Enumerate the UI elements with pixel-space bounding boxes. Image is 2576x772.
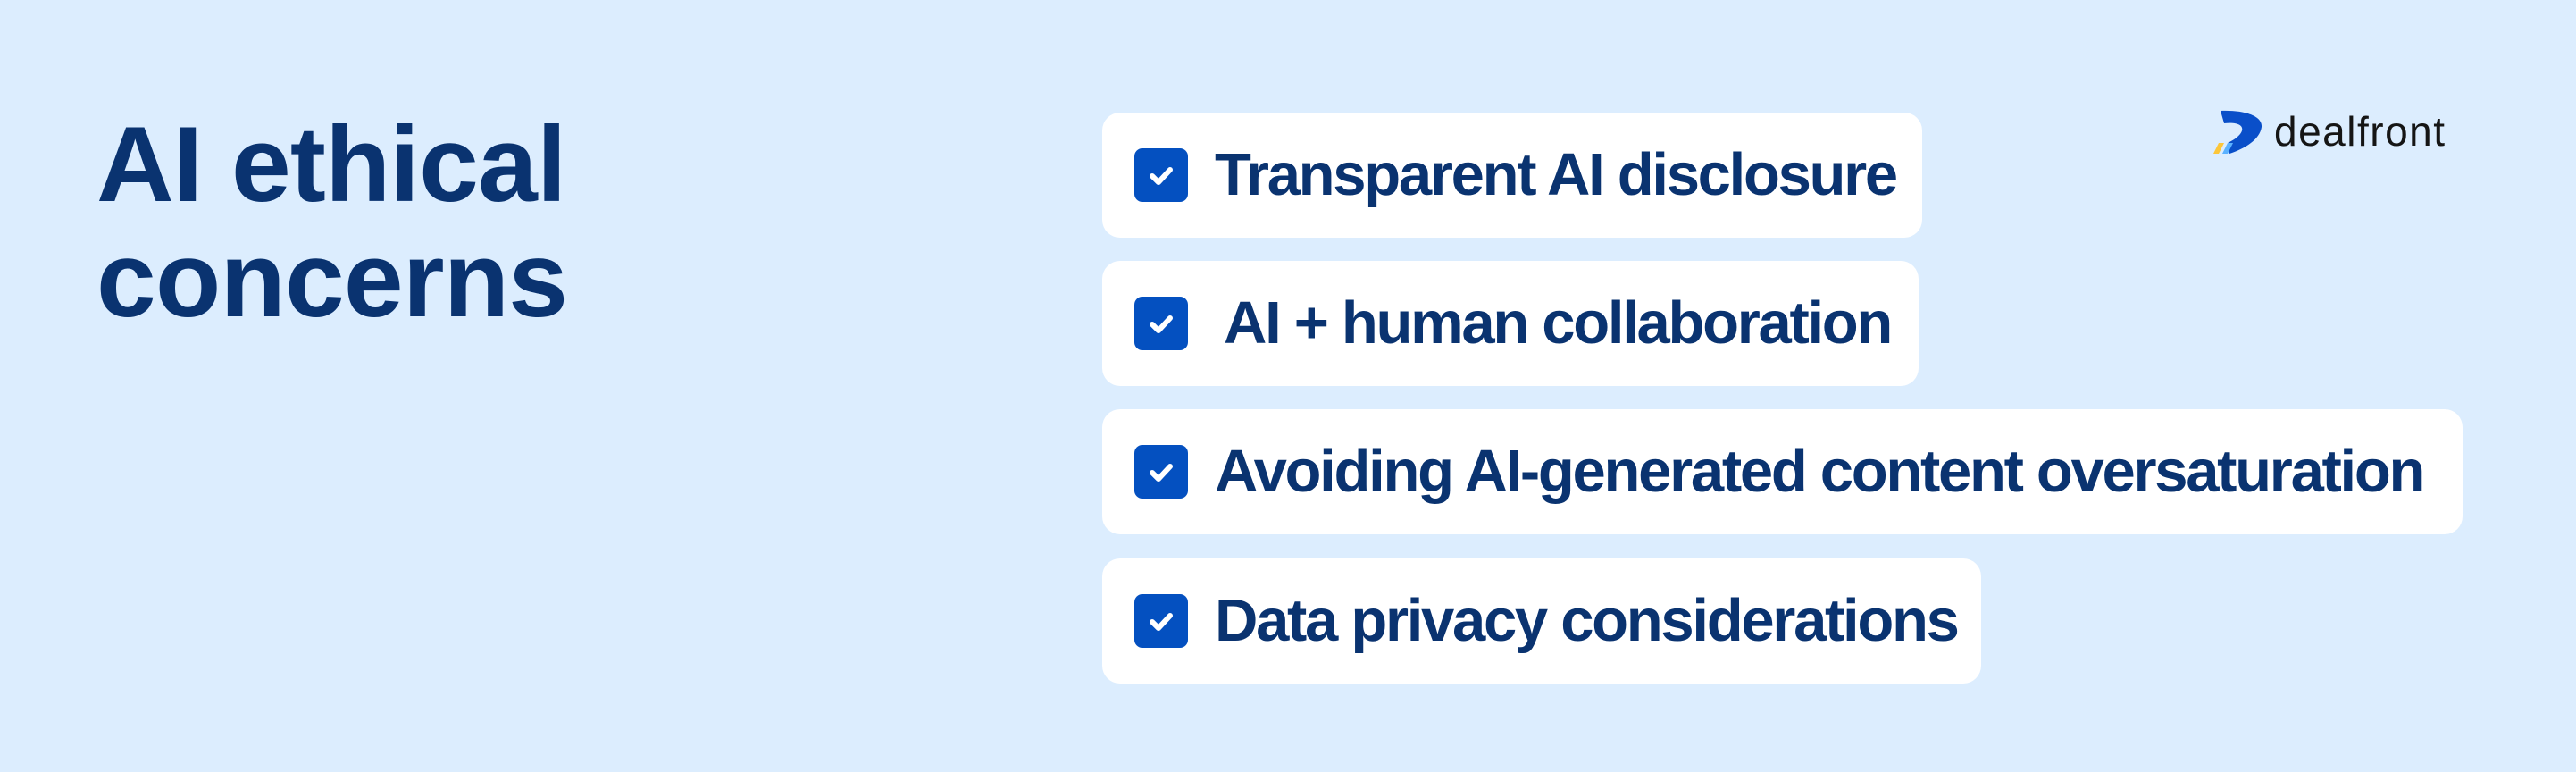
item: collaboration (1102, 261, 1919, 386)
icon: checkbox (1134, 445, 1188, 499)
icon: checkbox (1134, 148, 1188, 202)
text: Data privacy considerations (1215, 587, 1958, 654)
icon: checkbox (1134, 594, 1188, 648)
title (96, 105, 567, 340)
item: transparent disclosure (1102, 113, 1922, 238)
item: oversaturation (1102, 409, 2463, 534)
item: data privacy (1102, 558, 1981, 684)
logo: dealfront: dealfront (2274, 108, 2446, 155)
title: AI ethical (96, 105, 566, 224)
text: Avoiding AI-generated content oversaturation (1215, 438, 2423, 505)
title: concerns (96, 220, 567, 340)
text: AI + human collaboration (1224, 290, 1891, 357)
icon: checkbox (1134, 297, 1188, 350)
text: Transparent AI disclosure (1215, 141, 1896, 208)
